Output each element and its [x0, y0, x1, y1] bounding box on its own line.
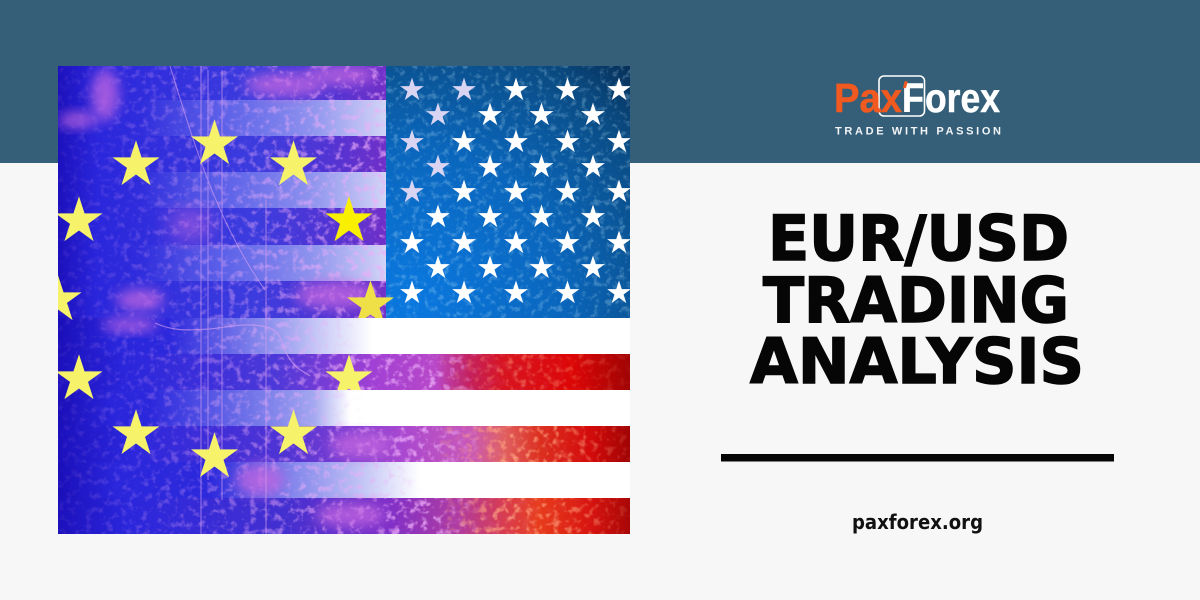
flag image: blended EU and US flags — [34, 65, 631, 534]
logo wordmark: Pax — [834, 75, 902, 121]
title: TRADING — [763, 264, 1069, 337]
EU stars — [34, 119, 394, 477]
title: EUR/USD — [768, 202, 1069, 275]
canton — [386, 66, 630, 318]
title: ANALYSIS — [750, 325, 1084, 398]
logo frame — [879, 76, 924, 116]
website url: paxforex.org — [852, 510, 983, 534]
surface scratches — [155, 66, 310, 534]
logo remaining letters: orex — [925, 75, 1000, 121]
logo tagline: TRADE WITH PASSION — [835, 126, 1001, 138]
divider rule — [721, 454, 1114, 462]
logo F letter: F — [902, 75, 924, 121]
lower stripes — [162, 318, 630, 534]
header band — [0, 0, 1200, 163]
grunge texture — [58, 65, 630, 534]
logo accent tick — [903, 81, 908, 88]
title — [750, 202, 1084, 398]
upper stripes — [58, 66, 386, 318]
logo — [834, 75, 1001, 138]
US stars — [400, 78, 631, 303]
flag base field — [58, 318, 348, 498]
